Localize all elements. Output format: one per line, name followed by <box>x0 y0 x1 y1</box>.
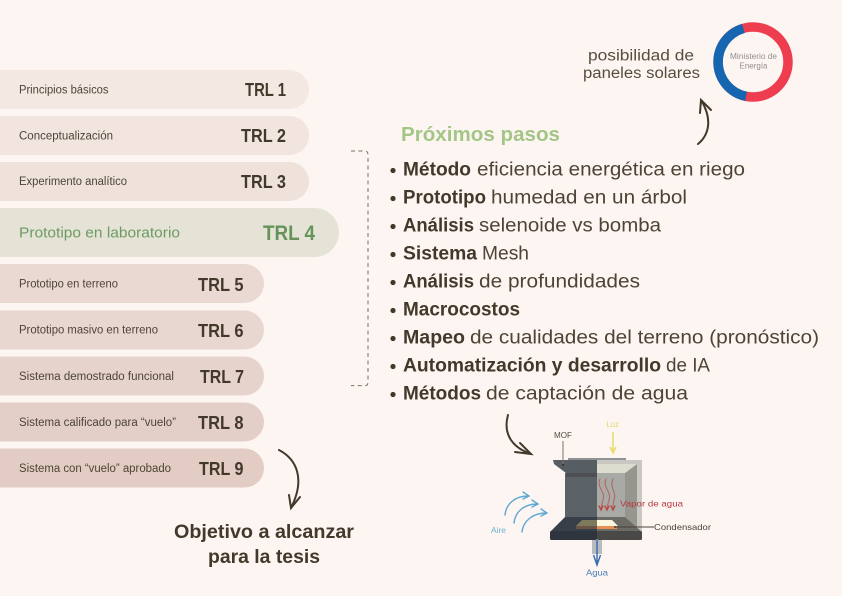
logo: Ministerio de Energía <box>718 27 788 97</box>
label: condensador <box>614 522 711 532</box>
TRL 8 row: TRL 8 <box>198 413 244 433</box>
text: solar panels note: paneles solares <box>583 65 700 82</box>
TRL 7 row <box>0 356 264 396</box>
text: thesis objective: para la tesis <box>208 547 320 568</box>
text: solar panels note: posibilidad de <box>588 48 694 65</box>
step 3: selenoide vs bomba <box>479 216 661 237</box>
label and arrow: aire: Aire <box>491 525 506 535</box>
step 3 <box>390 216 661 237</box>
step 9 <box>390 384 688 405</box>
TRL 5 row <box>0 264 264 303</box>
label and arrow: agua: Agua <box>586 568 608 578</box>
water vapor arrows <box>599 479 615 510</box>
text: thesis objective: Objetivo a alcanzar <box>174 522 355 543</box>
dashed bracket <box>351 151 368 386</box>
TRL 9 row <box>0 448 264 488</box>
label: MOF <box>554 430 572 466</box>
step 3: Análisis <box>403 216 474 237</box>
label: condensador: Condensador <box>654 522 711 532</box>
TRL 1 row <box>0 70 309 109</box>
step 2 <box>390 188 687 209</box>
arrow: list to water device <box>507 415 531 454</box>
step 5: de profundidades <box>479 272 640 293</box>
label: MOF: MOF <box>554 430 572 440</box>
step 8: Automatización y desarrollo <box>403 356 661 377</box>
TRL 9 row: Sistema con “vuelo” aprobado <box>19 463 171 475</box>
device body <box>550 458 642 554</box>
TRL 3 row: TRL 3 <box>241 172 286 192</box>
label and arrow: luz <box>606 419 619 453</box>
panel: TRL scale <box>0 70 339 488</box>
arrow: up to solar panels note <box>698 100 711 144</box>
diagram: water capture device <box>491 419 711 578</box>
TRL 5 row: TRL 5 <box>198 275 244 295</box>
TRL 4 row highlighted: Prototipo en laboratorio <box>19 225 180 242</box>
TRL 7 row: TRL 7 <box>200 367 244 387</box>
step 1: Método <box>403 160 471 181</box>
label: vapor de agua: Vapor de agua <box>620 498 683 508</box>
list: next steps <box>390 160 819 405</box>
step 9: Métodos <box>403 384 481 405</box>
step 1: eficiencia energética en riego <box>477 160 745 181</box>
TRL 2 row <box>0 116 309 155</box>
step 7: Mapeo <box>403 328 465 349</box>
TRL 8 row: Sistema calificado para “vuelo” <box>19 417 176 429</box>
label and arrow: luz: Luz <box>606 419 619 429</box>
step 2: humedad en un árbol <box>491 188 687 209</box>
heading: próximos pasos: Próximos pasos <box>401 123 560 146</box>
condenser <box>576 520 618 529</box>
step 4: Mesh <box>482 244 529 265</box>
step 5: Análisis <box>403 272 474 293</box>
step 2: Prototipo <box>403 188 486 209</box>
TRL 2 row: Conceptualización <box>19 130 113 142</box>
TRL 9 row: TRL 9 <box>199 459 244 479</box>
step 9: de captación de agua <box>486 384 688 405</box>
label and arrow: aire <box>491 492 547 535</box>
TRL 6 row: Prototipo masivo en terreno <box>19 324 158 336</box>
text: solar panels note <box>583 48 700 82</box>
TRL 1 row: Principios básicos <box>19 84 109 96</box>
TRL 6 row <box>0 310 264 350</box>
logo: Ministerio de Energía: Ministerio de <box>730 52 778 61</box>
TRL 2 row: TRL 2 <box>241 126 286 146</box>
step 4: Sistema <box>403 244 477 265</box>
TRL 3 row <box>0 162 309 201</box>
TRL 6 row: TRL 6 <box>198 321 244 341</box>
arrow: TRL 9 to objective <box>279 450 300 508</box>
label and arrow: agua <box>586 540 608 578</box>
TRL 3 row: Experimento analítico <box>19 176 127 188</box>
TRL 8 row <box>0 402 264 442</box>
step 8: de IA <box>666 356 710 377</box>
step 6: Macrocostos <box>403 300 520 321</box>
TRL 4 row highlighted <box>0 208 339 257</box>
logo: Ministerio de Energía: Energía <box>740 62 768 70</box>
step 5 <box>390 272 640 293</box>
step 4 <box>390 244 529 265</box>
text: thesis objective <box>174 522 355 568</box>
TRL 4 row highlighted: TRL 4 <box>263 221 315 245</box>
TRL 7 row: Sistema demostrado funcional <box>19 371 174 383</box>
TRL 1 row: TRL 1 <box>245 80 286 100</box>
step 7: de cualidades del terreno (pronóstico) <box>470 328 819 349</box>
TRL 5 row: Prototipo en terreno <box>19 278 118 290</box>
step 1 <box>390 160 745 181</box>
